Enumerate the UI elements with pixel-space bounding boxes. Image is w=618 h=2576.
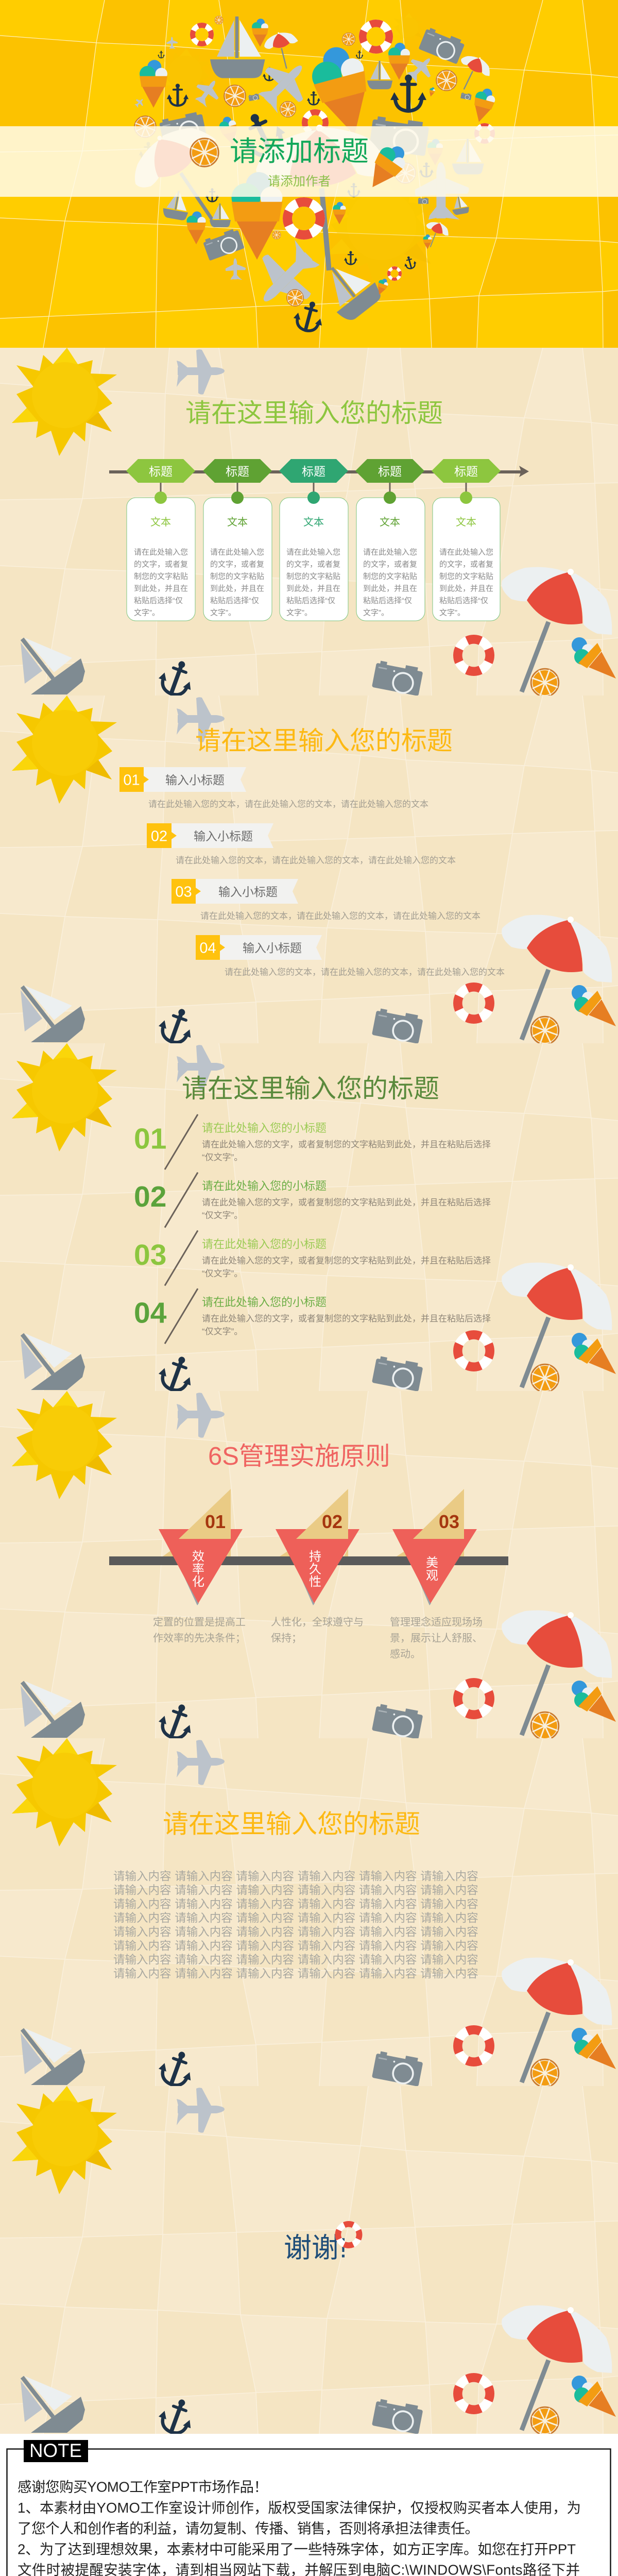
icon: orange: [531, 1016, 559, 1044]
card 3: 的文字，或者复: [286, 560, 340, 569]
item 01: 请在此处输入您的文字，或者复制您的文字粘贴到此处，并且在粘贴后选择: [202, 1140, 491, 1149]
note label: NOTE: [29, 2440, 82, 2461]
icon: life ring: [458, 2378, 490, 2410]
item 03: 请在此处输入您的文字，或者复制您的文字粘贴到此处，并且在粘贴后选择: [202, 1256, 491, 1265]
card 2: 文本: [227, 516, 248, 528]
list item 01: 请在此处输入您的文本，请在此处输入您的文本，请在此处输入您的文本: [148, 800, 428, 809]
icon: orange: [436, 70, 457, 91]
icon: umbrella: [502, 915, 612, 1040]
icon: sailboat: [21, 2028, 85, 2085]
item 04: 04: [134, 1297, 167, 1330]
text block: 请输入内容 请输入内容 请输入内容 请输入内容 请输入内容 请输入内容: [113, 1926, 478, 1938]
principle 02: 久: [309, 1562, 321, 1577]
list item 01: 输入小标题: [165, 773, 225, 787]
thanks text: 谢谢!: [284, 2233, 347, 2264]
principle 03: 美: [426, 1556, 438, 1570]
icon: camera large: [369, 115, 430, 156]
icon: ice: [186, 211, 206, 244]
card 3: [279, 459, 348, 621]
icon: ice cream: [572, 1681, 616, 1722]
icon: orange: [280, 101, 296, 117]
icon: orange: [287, 290, 303, 306]
icon: camera tiny: [418, 198, 428, 204]
item 02: 02: [134, 1180, 166, 1213]
icon: ice cream: [388, 43, 410, 80]
item 04: “仅文字”。: [202, 1327, 243, 1336]
title: 请添加标题: [230, 136, 369, 167]
principle 02: 性: [309, 1575, 321, 1589]
icon: large ice cream: [306, 41, 380, 142]
icon: plane small: [226, 258, 246, 280]
icon: anchor tiny: [356, 50, 363, 58]
icon: sun: [12, 2086, 117, 2194]
icon: camera: [372, 1703, 424, 1739]
icon: big ice cream lower: [232, 172, 282, 260]
icon: orange: [531, 2407, 559, 2435]
icon: plane: [177, 349, 225, 395]
principle 02: [262, 1489, 379, 1644]
panel: hero cover: [0, 0, 618, 348]
icon: camera: [372, 659, 424, 696]
icon: ice cream: [572, 1333, 616, 1374]
card 2: 粘贴后选择“仅: [210, 597, 259, 605]
icon: anchor: [402, 255, 418, 270]
principle 03: 03: [439, 1511, 459, 1532]
icon: big plane: [242, 232, 331, 321]
heading: 请在这里输入您的标题: [182, 1074, 439, 1103]
item 03: “仅文字”。: [202, 1268, 243, 1278]
card 5: [432, 459, 501, 621]
icon: anchor: [167, 83, 188, 106]
text block: 请输入内容 请输入内容 请输入内容 请输入内容 请输入内容 请输入内容: [113, 1954, 478, 1966]
principle 02: 持: [309, 1550, 321, 1564]
icon: large umbrella under band: [249, 104, 418, 280]
card 4: 制您的文字粘贴: [363, 572, 417, 581]
card 4: 的文字，或者复: [363, 560, 417, 569]
background tile grid: [0, 1391, 618, 1739]
icon: plane: [177, 697, 225, 742]
item 04: 请在此处输入您的文字，或者复制您的文字粘贴到此处，并且在粘贴后选择: [202, 1314, 491, 1324]
icon: camera: [419, 26, 466, 64]
icon: ring top left: [193, 25, 211, 44]
card 5: 的文字，或者复: [439, 560, 493, 569]
icon: anchor tiny: [158, 51, 165, 58]
icon: orange small: [215, 16, 223, 24]
timeline arrow: [109, 466, 529, 477]
icon: faint sun top right: [392, 13, 424, 45]
card 4: [355, 459, 425, 621]
background tile grid: [0, 0, 618, 348]
author: 请添加作者: [268, 175, 331, 189]
panel: slide 6 thanks: [0, 2086, 618, 2434]
note text: 1、本素材由YOMO工作室设计师创作，版权受国家法律保护，仅授权购买者本人使用，为: [18, 2500, 581, 2516]
card 3: 标题: [302, 465, 325, 478]
icon: sun: [12, 1391, 117, 1499]
icon: ice cream: [572, 985, 616, 1026]
icon: anchor small: [347, 183, 360, 196]
card 4: 到此处，并且在: [363, 584, 417, 593]
card 5: 制您的文字粘贴: [439, 572, 493, 581]
list item 04: 04: [199, 940, 216, 956]
icon: ice cream: [572, 637, 616, 679]
card 1: 的文字，或者复: [134, 560, 188, 569]
icon: orange: [342, 33, 355, 45]
background tile grid: [0, 1738, 618, 2086]
icon: plane: [177, 1740, 225, 1785]
item 02: 请在此处输入您的小标题: [202, 1180, 327, 1193]
icon: orange: [531, 1712, 559, 1740]
icon: boat under band: [452, 139, 484, 174]
icon: faint plane: [133, 96, 146, 109]
list item 03: 03: [175, 884, 192, 901]
icon: big plane right: [415, 162, 469, 219]
text block: [113, 1870, 478, 1980]
icon: anchor: [155, 2394, 199, 2438]
icon: boat: [210, 204, 231, 227]
icon: anchor: [263, 67, 276, 80]
icon: plane: [190, 74, 226, 110]
icon: umbrella: [502, 1958, 612, 2082]
icon: camera: [372, 1007, 424, 1044]
item 03: [134, 1230, 491, 1285]
list item 04: 输入小标题: [243, 941, 302, 955]
note text: 了您个人和创作者的利益，请勿复制、传播、销售，否则将承担法律责任。: [18, 2520, 479, 2536]
icon: boat left: [162, 189, 192, 221]
principle 02: 人性化，全球遵守与: [271, 1616, 364, 1628]
panel: slide 5 text block: [0, 1738, 618, 2086]
item 01: [134, 1114, 491, 1170]
item 01: “仅文字”。: [202, 1153, 243, 1162]
list item 02: 请在此处输入您的文本，请在此处输入您的文本，请在此处输入您的文本: [176, 855, 456, 866]
heart of beach icons: [127, 13, 497, 334]
item 04: [134, 1289, 491, 1344]
card 1: 到此处，并且在: [134, 584, 188, 593]
icon: ice left: [140, 60, 167, 108]
panel: note and footer: [6, 2440, 611, 2576]
card 2: 标题: [226, 465, 249, 478]
panel: slide 1 timeline cards: [0, 348, 618, 696]
icon: ice tiny: [374, 277, 390, 296]
icon: anchor: [307, 91, 320, 105]
principle 01: 定置的位置是提高工: [153, 1616, 246, 1628]
title band: [0, 126, 618, 197]
icon: camera: [159, 111, 207, 145]
icon: life ring: [458, 2030, 490, 2062]
icon: ring top: [363, 23, 389, 50]
card 3: 请在此处输入您: [286, 548, 340, 556]
heading: 请在这里输入您的标题: [195, 726, 453, 755]
icon: boat small: [450, 194, 470, 215]
text block: 请输入内容 请输入内容 请输入内容 请输入内容 请输入内容 请输入内容: [113, 1898, 478, 1910]
icon: orange: [134, 116, 156, 138]
text block: 请输入内容 请输入内容 请输入内容 请输入内容 请输入内容 请输入内容: [113, 1870, 478, 1883]
card 5: 标题: [454, 465, 478, 478]
icon: umbrella: [502, 2306, 612, 2430]
icon: ice small: [423, 234, 432, 249]
heading: 请在这里输入您的标题: [163, 1809, 420, 1838]
icon: orange on band: [191, 139, 218, 166]
text block: 请输入内容 请输入内容 请输入内容 请输入内容 请输入内容 请输入内容: [113, 1884, 478, 1897]
icon: orange: [531, 2059, 559, 2087]
list item 03: 请在此处输入您的文本，请在此处输入您的文本，请在此处输入您的文本: [200, 911, 480, 921]
card 1: 请在此处输入您: [134, 548, 188, 556]
card 2: [203, 459, 272, 621]
list item 01: 01: [123, 772, 140, 788]
card 3: 文本: [303, 516, 324, 528]
icon: camera tiny: [460, 92, 472, 100]
card 2: 文字”。: [210, 608, 236, 617]
panel: slide 2 staircase list: [0, 696, 618, 1043]
card 4: 粘贴后选择“仅: [363, 597, 412, 605]
item 02: “仅文字”。: [202, 1211, 243, 1221]
icon: orange: [224, 85, 246, 107]
icon: umbrella: [458, 55, 491, 92]
card 4: 文字”。: [363, 608, 389, 617]
icon: faint sun right: [326, 176, 436, 290]
card 1: 标题: [149, 465, 173, 478]
card 3: 文字”。: [286, 608, 312, 617]
icon: large plane: [250, 50, 319, 119]
background tile grid: [0, 696, 618, 1043]
icon: camera: [372, 2050, 424, 2087]
icon: orange: [531, 669, 559, 697]
list item 04: 请在此处输入您的文本，请在此处输入您的文本，请在此处输入您的文本: [225, 968, 505, 977]
icon: sun: [12, 1043, 117, 1151]
note box: [7, 2440, 611, 2576]
icon: orange: [531, 1364, 559, 1392]
card 2: 到此处，并且在: [210, 584, 264, 593]
icon: anchor: [205, 188, 219, 201]
icon: ice cream: [572, 2376, 616, 2417]
icon: sun: [12, 696, 117, 804]
icon: camera: [202, 228, 245, 261]
icon: camera: [372, 1355, 424, 1392]
card 1: 文字”。: [134, 608, 160, 617]
text block: 请输入内容 请输入内容 请输入内容 请输入内容 请输入内容 请输入内容: [113, 1967, 478, 1980]
card 2: 制您的文字粘贴: [210, 572, 264, 581]
card 1: 文本: [150, 516, 171, 528]
card 1: 制您的文字粘贴: [134, 572, 188, 581]
list item 03: 输入小标题: [218, 885, 278, 899]
icon: umbrella: [502, 567, 612, 692]
icon: life ring: [458, 987, 490, 1019]
icon: sun: [12, 348, 117, 456]
icon: sailboat large: [210, 16, 265, 78]
icon: anchor: [155, 1699, 199, 1743]
icon: camera tiny: [248, 93, 260, 101]
icon: anchor: [155, 1004, 199, 1047]
icon: anchor under band: [419, 162, 434, 177]
item 01: 请在此处输入您的小标题: [202, 1122, 327, 1134]
icon: life ring: [458, 1335, 490, 1367]
card 2: 请在此处输入您: [210, 548, 264, 556]
icon: umbrella under band: [127, 111, 251, 232]
icon: small boat: [367, 61, 392, 89]
card 3: 粘贴后选择“仅: [286, 597, 335, 605]
background tile grid: [0, 1043, 618, 1391]
card 1: [126, 459, 195, 621]
card 5: 文字”。: [439, 608, 465, 617]
heading: 请在这里输入您的标题: [185, 399, 443, 428]
card 3: 制您的文字粘贴: [286, 572, 340, 581]
principle 01: 化: [192, 1575, 204, 1589]
item 02: 请在此处输入您的文字，或者复制您的文字粘贴到此处，并且在粘贴后选择: [202, 1198, 491, 1208]
icon: sailboat: [21, 638, 85, 694]
principle 03: 管理理念适应现场场: [390, 1616, 483, 1628]
principle 01: 作效率的先决条件；: [153, 1632, 246, 1644]
list item 02: 02: [151, 828, 167, 845]
icon: ring right: [476, 125, 493, 142]
background tile grid: [0, 2086, 618, 2434]
icon: camera: [372, 2398, 424, 2434]
principle 02: 保持；: [271, 1632, 302, 1644]
icon: faint plane: [166, 37, 178, 49]
card 5: 请在此处输入您: [439, 548, 493, 556]
principle 03: 景，展示让人舒服、: [390, 1632, 483, 1644]
note text: 感谢您购买YOMO工作室PPT市场作品！: [18, 2479, 268, 2495]
item 04: 请在此处输入您的小标题: [202, 1296, 327, 1309]
list item 02: [147, 823, 456, 866]
icon: faint sun top left: [159, 48, 211, 103]
list item 02: 输入小标题: [194, 829, 253, 843]
icon: life ring: [458, 1683, 490, 1715]
card 4: 请在此处输入您: [363, 548, 417, 556]
icon: ice tiny: [428, 87, 436, 97]
card 5: 文本: [456, 516, 476, 528]
icon: small life ring: [338, 2224, 359, 2245]
background tile grid: [0, 348, 618, 696]
icon: ring tiny: [389, 268, 400, 279]
icon: umbrella small: [426, 222, 449, 247]
icon: umbrella: [502, 1611, 612, 1735]
icon: orange under band: [395, 163, 416, 183]
icon: anchor: [344, 251, 357, 264]
icon: ice cream: [572, 2028, 616, 2069]
item 02: [134, 1173, 491, 1228]
icon: ring: [305, 112, 325, 133]
principle 02: 02: [322, 1511, 342, 1532]
icon: anchor: [155, 656, 199, 700]
icon: big ring: [287, 202, 320, 235]
icon: ice cream: [252, 19, 268, 47]
principle 01: [109, 1489, 262, 1644]
icon: sailboat: [21, 2376, 85, 2433]
note text: 2、为了达到理想效果，本素材中可能采用了一些特殊字体，如方正字库。如您在打开PPT: [18, 2541, 576, 2557]
icon: plane: [177, 1393, 225, 1438]
principle 03: 感动。: [390, 1648, 421, 1660]
icon: sun: [12, 1738, 117, 1846]
item 03: 请在此处输入您的小标题: [202, 1238, 327, 1250]
icon: life ring: [458, 639, 490, 671]
icon: sailboat: [21, 1681, 85, 1738]
icon: ice small: [333, 202, 346, 224]
item 01: 01: [134, 1122, 166, 1155]
principle 01: 01: [205, 1511, 226, 1532]
card 3: 到此处，并且在: [286, 584, 340, 593]
icon: plane: [403, 50, 439, 87]
icon: umbrella: [502, 1263, 612, 1387]
icon: sailboat: [21, 986, 85, 1042]
icon: orange tiny: [272, 231, 281, 239]
icon: sailboat: [21, 1333, 85, 1390]
icon: plane: [177, 1045, 225, 1090]
panel: slide 4 6S principles: [0, 1391, 618, 1738]
card 5: 粘贴后选择“仅: [439, 597, 488, 605]
list item 04: [196, 935, 505, 977]
icon: ice under band: [427, 139, 443, 165]
icon: anchor faded: [139, 142, 158, 161]
icon: ice right: [469, 86, 497, 125]
panel: slide 3 numbered list: [0, 1043, 618, 1391]
icon: ice: [217, 115, 241, 147]
icon: anchor: [155, 1351, 199, 1395]
icon: sailboat tilted: [313, 252, 385, 325]
icon: anchor: [155, 2046, 199, 2090]
icon: umbrella small: [262, 25, 307, 72]
principle 03: 观: [426, 1569, 438, 1583]
list item 01: [119, 767, 428, 809]
list item 03: [171, 879, 480, 921]
text block: 请输入内容 请输入内容 请输入内容 请输入内容 请输入内容 请输入内容: [113, 1939, 478, 1953]
card 5: 到此处，并且在: [439, 584, 493, 593]
card 1: 粘贴后选择“仅: [134, 597, 183, 605]
item 03: 03: [134, 1239, 166, 1272]
note text: [18, 2479, 600, 2576]
icon: ice cream on band: [361, 139, 412, 195]
icon: anchor tilted: [234, 106, 290, 162]
icon: anchor: [291, 298, 327, 334]
card 4: 文本: [380, 516, 400, 528]
heading: 6S管理实施原则: [208, 1443, 390, 1470]
principle 01: 效: [192, 1550, 204, 1564]
principle 03: [379, 1489, 508, 1660]
icon: anchor large: [390, 75, 426, 111]
principle 01: 率: [192, 1562, 204, 1577]
icon: plane: [177, 2088, 225, 2133]
card 2: 的文字，或者复: [210, 560, 264, 569]
card 4: 标题: [378, 465, 402, 478]
text block: 请输入内容 请输入内容 请输入内容 请输入内容 请输入内容 请输入内容: [113, 1911, 478, 1925]
